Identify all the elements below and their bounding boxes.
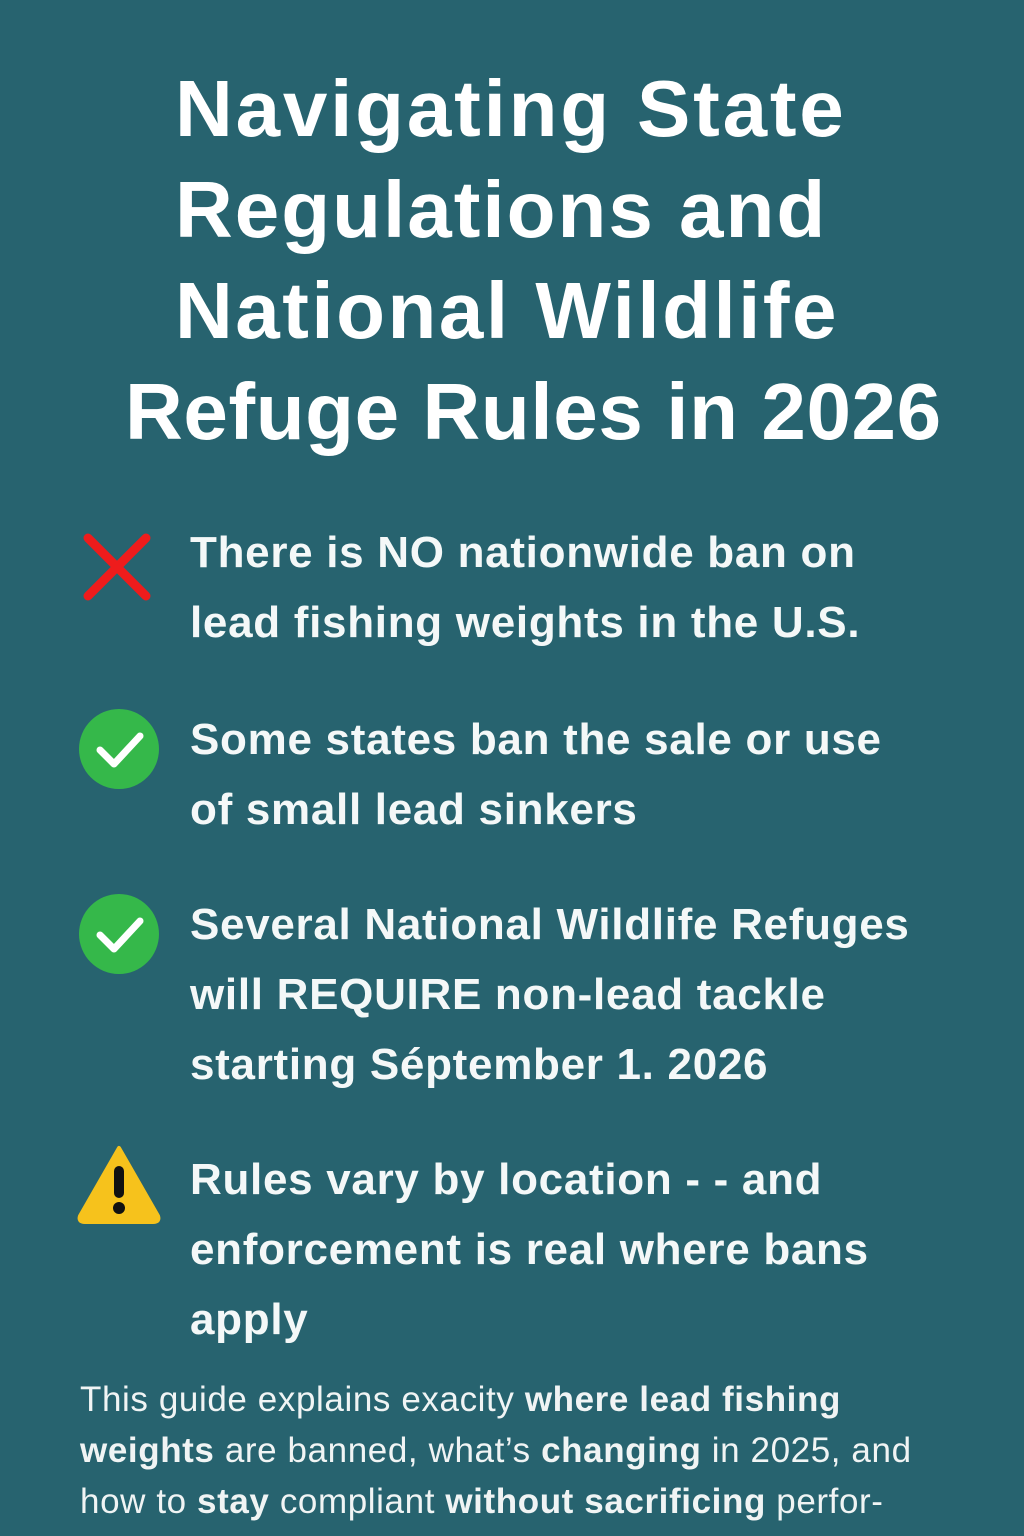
intro paragraph xyxy=(80,1380,912,1521)
text: some states ban: Some states ban the sale or use xyxy=(190,715,882,764)
text: no nationwide ban xyxy=(190,528,860,647)
text: rules vary: apply xyxy=(190,1295,308,1344)
text: refuges require non-lead xyxy=(190,900,910,1089)
icon: green check 1 xyxy=(79,709,159,789)
title xyxy=(125,64,942,456)
text: some states ban xyxy=(190,715,882,834)
intro paragraph: This guide explains exacity where lead fishing xyxy=(80,1380,841,1419)
text: refuges require non-lead: Several National Wildlife Refuges xyxy=(190,900,910,949)
icon: green check 2 xyxy=(79,894,159,974)
text: some states ban: of small lead sinkers xyxy=(190,785,638,834)
icon: red cross xyxy=(84,534,150,600)
text: no nationwide ban: There is NO nationwide ban on xyxy=(190,528,856,577)
text: refuges require non-lead: starting Séptember 1. 2026 xyxy=(190,1040,768,1089)
intro paragraph: weights are banned, what’s changing in 2025, and xyxy=(80,1431,912,1470)
text: refuges require non-lead: will REQUIRE non-lead tackle xyxy=(190,970,826,1019)
text: rules vary xyxy=(190,1155,869,1344)
title: Regulations and xyxy=(175,165,827,254)
text: no nationwide ban: lead fishing weights in the U.S. xyxy=(190,598,860,647)
title: Navigating State xyxy=(175,64,847,153)
title: National Wildlife xyxy=(175,266,839,355)
intro paragraph: how to stay compliant without sacrificing perfor- xyxy=(80,1482,884,1521)
text: rules vary: Rules vary by location - - and xyxy=(190,1155,822,1204)
title: Refuge Rules in 2026 xyxy=(125,367,942,456)
text: rules vary: enforcement is real where bans xyxy=(190,1225,869,1274)
icon: warning triangle xyxy=(78,1146,160,1224)
